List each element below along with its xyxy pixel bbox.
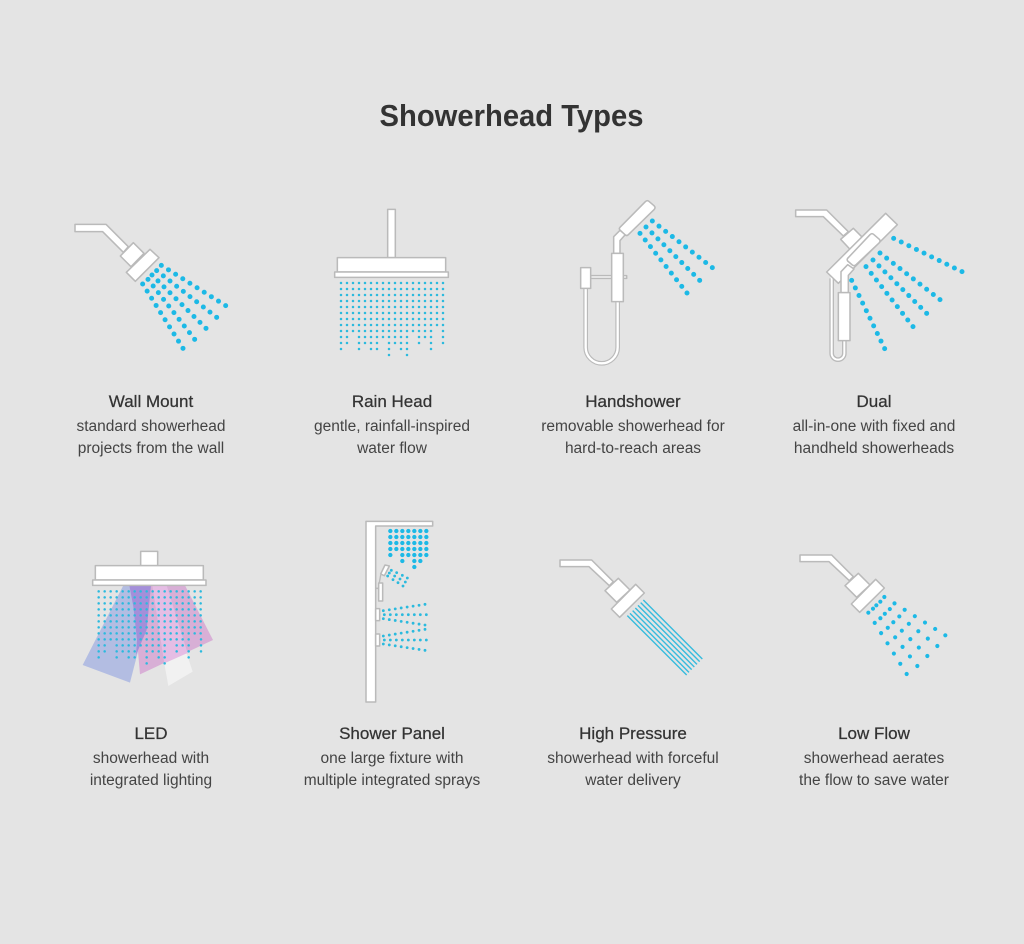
heading: rain head: Rain Head [352, 392, 432, 411]
description: LED: integrated lighting [90, 772, 212, 789]
heading: dual: Dual [857, 392, 891, 411]
description: dual: all-in-one with fixed and [793, 418, 955, 435]
panel: rain head [314, 209, 470, 457]
heading: low flow: Low Flow [838, 724, 911, 743]
description: dual: handheld showerheads [794, 440, 954, 457]
panel: dual [793, 210, 962, 457]
icon: high pressure showerhead [560, 560, 702, 675]
title: Showerhead Types [380, 98, 644, 133]
panel: low flow [799, 555, 949, 789]
icon: wall mount showerhead [75, 224, 226, 348]
description: rain head: water flow [356, 440, 428, 457]
description: handshower: hard-to-reach areas [565, 440, 701, 457]
description: high pressure: water delivery [584, 772, 681, 789]
panel: wall mount [75, 224, 226, 457]
panel: handshower [541, 201, 725, 457]
description: shower panel: multiple integrated sprays [304, 772, 481, 789]
icon: dual showerhead [796, 210, 962, 360]
description: LED: showerhead with [93, 750, 209, 767]
icon: low flow showerhead [800, 555, 945, 674]
description: high pressure: showerhead with forceful [547, 750, 719, 767]
heading: wall mount: Wall Mount [109, 392, 193, 411]
description: shower panel: one large fixture with [320, 750, 464, 767]
heading: LED: LED [134, 724, 168, 743]
heading: high pressure: High Pressure [579, 724, 687, 743]
icon: shower panel [366, 521, 433, 702]
description: low flow: the flow to save water [799, 772, 949, 789]
icon: LED showerhead [83, 551, 213, 686]
panel: LED [83, 551, 213, 789]
heading: handshower: Handshower [585, 392, 681, 411]
panel: shower panel [304, 521, 481, 789]
description: rain head: gentle, rainfall-inspired [314, 418, 470, 435]
icon: handshower [581, 201, 712, 363]
panel: high pressure [547, 560, 719, 789]
icon: rain head [335, 209, 448, 355]
description: low flow: showerhead aerates [804, 750, 944, 767]
heading: shower panel: Shower Panel [339, 724, 445, 743]
description: handshower: removable showerhead for [541, 418, 725, 435]
description: wall mount: projects from the wall [78, 440, 224, 457]
description: wall mount: standard showerhead [76, 418, 226, 435]
